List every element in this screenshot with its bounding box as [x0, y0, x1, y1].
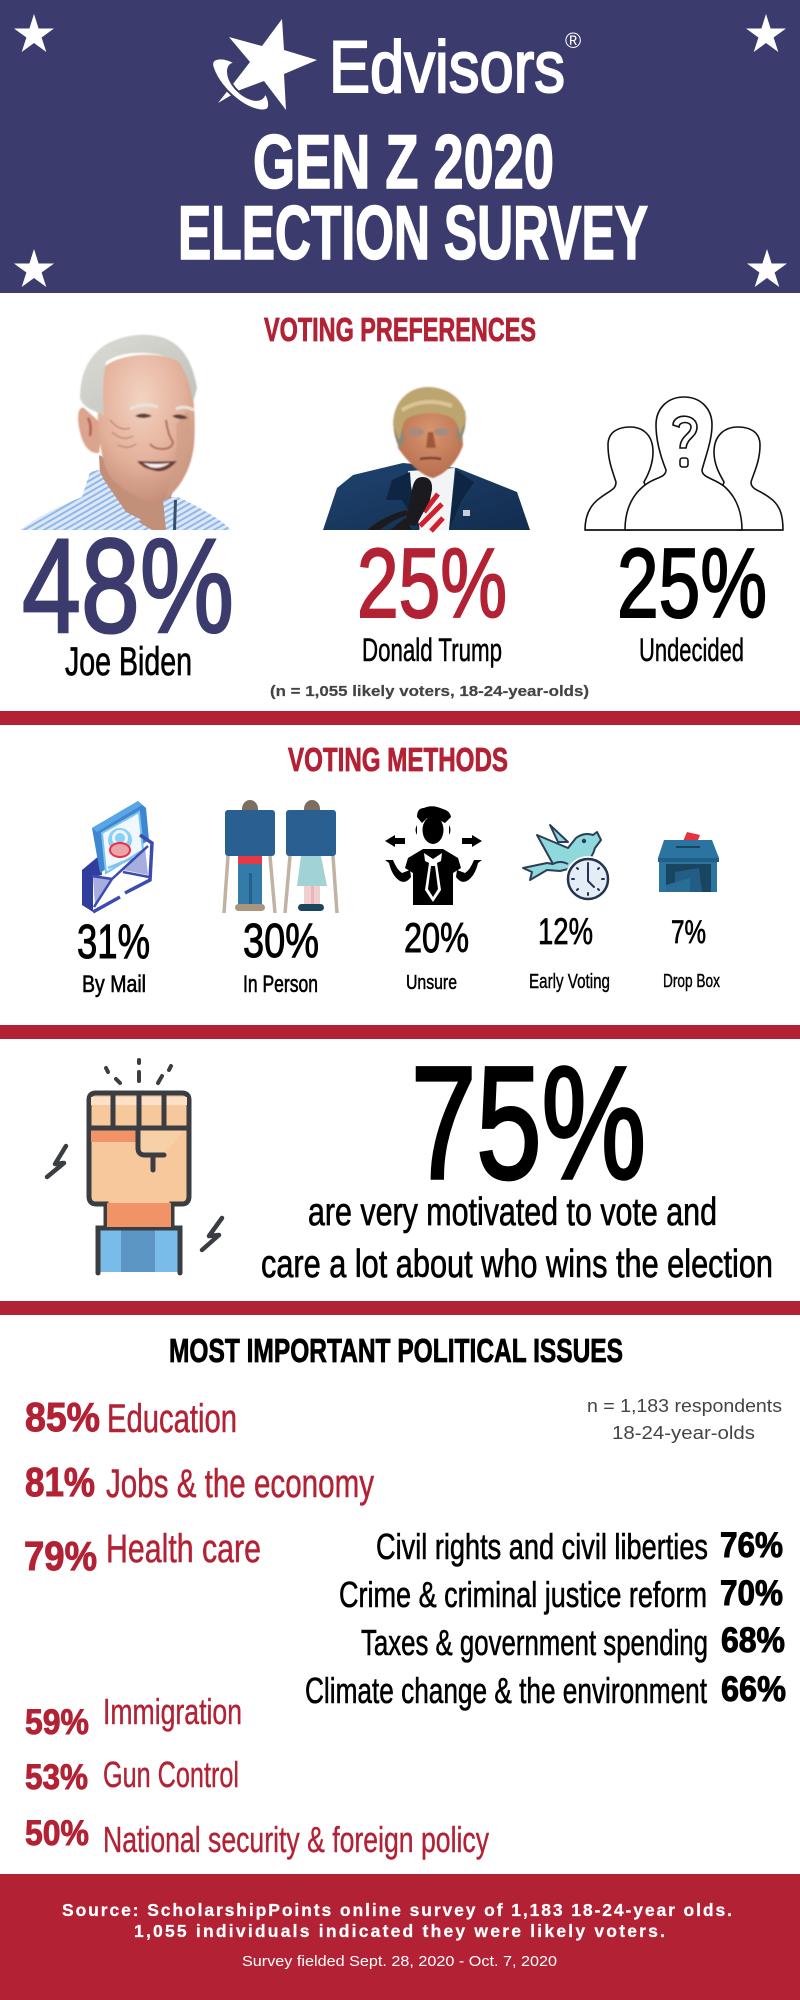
icon: voting booths — [224, 800, 337, 913]
panel: motivation — [47, 1033, 773, 1286]
panel: voting preferences — [20, 311, 783, 700]
stat: 12% early voting: Early Voting — [529, 971, 610, 993]
title — [178, 120, 648, 276]
stat: 7% drop box: Drop Box — [663, 971, 720, 991]
stat: 75%: 75% — [411, 1033, 646, 1212]
issue: jobs: 81% — [25, 1459, 95, 1505]
stat: 25% Undecided: Undecided — [639, 632, 744, 668]
icon: star top left — [14, 14, 54, 52]
issue: national security: National security & foreign policy — [103, 1819, 489, 1860]
text: source: Source: ScholarshipPoints online survey of 1,183 18-24-year olds. — [62, 1900, 732, 1920]
stat: 25% Undecided — [617, 528, 767, 668]
issue: education: Education — [107, 1397, 237, 1441]
note: respondents: 18-24-year-olds — [612, 1423, 755, 1443]
stat: 30% in person — [243, 915, 319, 998]
stat: 25% Donald Trump: 25% — [357, 528, 507, 638]
icon: star top right — [746, 14, 786, 52]
issue: gun control: 53% — [25, 1758, 88, 1797]
panel: most important political issues — [24, 1332, 786, 1860]
issue: immigration: 59% — [25, 1703, 89, 1742]
heading: voting methods: VOTING METHODS — [288, 741, 508, 778]
stat: 25% Donald Trump — [357, 528, 507, 668]
icon: drop box — [658, 832, 719, 892]
icon: unsure person — [385, 806, 482, 905]
note: sample size: (n = 1,055 likely voters, 18-24-year-olds) — [270, 683, 589, 700]
text: survey dates: Survey fielded Sept. 28, 2020 - Oct. 7, 2020 — [242, 1953, 557, 1970]
issue: gun control — [25, 1754, 239, 1797]
icon: early voting bird and clock — [523, 825, 611, 902]
panel: voting methods — [77, 741, 720, 998]
issue: immigration — [25, 1691, 242, 1742]
icon: star bottom left — [14, 249, 54, 287]
issue: health care: 79% — [24, 1533, 97, 1579]
stat: 30% in person: In Person — [243, 971, 318, 998]
issue: national security: 50% — [25, 1814, 89, 1853]
stat: 20% unsure: 20% — [404, 914, 469, 961]
portrait: Donald Trump — [323, 387, 530, 531]
issue: health care: Health care — [106, 1527, 261, 1571]
stat: 31% by mail: 31% — [77, 916, 150, 969]
text: source — [62, 1900, 732, 1941]
icon: star bottom right — [747, 249, 787, 287]
stat: 31% by mail: By Mail — [82, 971, 146, 998]
stat: 48% Joe Biden: 48% — [22, 512, 234, 661]
panel: footer source — [0, 1874, 800, 2000]
note: respondents — [587, 1396, 782, 1443]
issue: immigration: Immigration — [103, 1691, 242, 1732]
title: GEN Z 2020 — [253, 120, 554, 205]
wordmark: Edvisors — [329, 27, 565, 108]
stat: 12% early voting — [529, 911, 610, 993]
logo: Edvisors — [212, 19, 581, 110]
icon: logo star with swoosh — [212, 19, 317, 110]
stat: 30% in person: 30% — [243, 915, 319, 968]
stat: 7% drop box: 7% — [671, 914, 706, 950]
issue: civil rights: 76% — [720, 1526, 783, 1565]
stat: 12% early voting: 12% — [538, 911, 593, 952]
note: respondents: n = 1,183 respondents — [587, 1396, 782, 1416]
registered mark: ® — [565, 28, 581, 53]
issue: national security — [25, 1814, 489, 1860]
text: source: 1,055 individuals indicated they were likely voters. — [134, 1921, 665, 1941]
icon: undecided silhouettes — [585, 397, 783, 530]
issue: climate: 66% — [721, 1670, 786, 1709]
stat: 25% Donald Trump: Donald Trump — [362, 632, 502, 668]
portrait: Joe Biden — [20, 335, 231, 530]
text: motivation description — [261, 1191, 773, 1286]
issue: jobs: Jobs & the economy — [106, 1462, 374, 1506]
stat: 7% drop box — [663, 914, 720, 991]
panel: header — [0, 0, 800, 293]
stat: 31% by mail — [77, 916, 150, 998]
issue: education: 85% — [25, 1394, 100, 1440]
heading: political issues: MOST IMPORTANT POLITICAL ISSUES — [169, 1332, 623, 1369]
issue: health care — [24, 1527, 261, 1579]
icon: mail ballot — [82, 801, 152, 912]
issue: crime: 70% — [720, 1574, 783, 1613]
icon: raised fist — [47, 1060, 222, 1273]
stat: 20% unsure — [404, 914, 469, 994]
issue: jobs — [25, 1459, 374, 1506]
stat: 20% unsure: Unsure — [406, 972, 457, 994]
issue: education — [25, 1394, 237, 1441]
heading: voting preferences: VOTING PREFERENCES — [264, 311, 536, 348]
stat: 48% Joe Biden: Joe Biden — [65, 640, 192, 684]
issue: taxes: 68% — [721, 1621, 785, 1660]
issue: gun control: Gun Control — [103, 1754, 239, 1795]
